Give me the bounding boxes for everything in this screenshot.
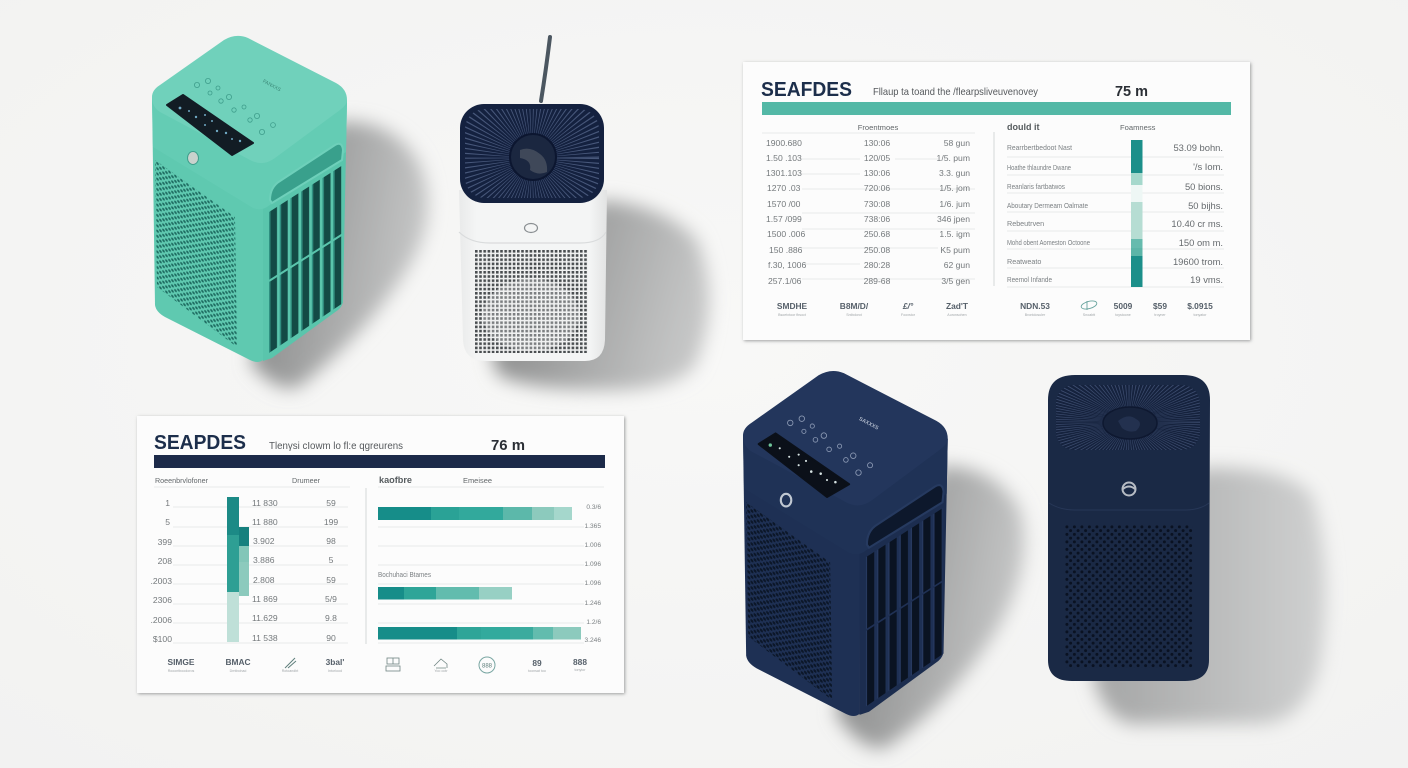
product: navy purifier angled — [743, 371, 948, 716]
lid seam — [459, 232, 606, 243]
fan hub — [1103, 407, 1157, 439]
left chart table: Drumeer — [292, 476, 320, 485]
front grille — [155, 160, 237, 347]
card background — [137, 416, 624, 693]
value column 1: 11 869 — [252, 594, 278, 604]
fan radial blades — [1067, 384, 1191, 460]
logo badge — [781, 494, 791, 506]
bar 1 — [378, 507, 572, 520]
footer stats: Sntbdorot — [846, 313, 862, 317]
footer stats: Yoo ootr — [434, 669, 448, 673]
axis values — [584, 504, 601, 644]
column 2 values: 280:28 — [864, 260, 890, 270]
footer stats: Rotoandbt — [282, 669, 298, 673]
title: SEAPDES — [154, 431, 246, 454]
axis values: 1.096 — [584, 580, 601, 587]
display indicators — [179, 107, 241, 142]
footer stats: tonyator — [1194, 313, 1207, 317]
row values: 50 bions. — [1185, 181, 1223, 192]
fan hub — [510, 134, 556, 180]
column 3 values: 1/5. pum — [937, 153, 970, 163]
footer stats: SMDHE — [777, 301, 808, 311]
side vent slats — [866, 508, 944, 706]
subtitle: Fllaup ta toand the /flearpsliveuvenovey — [873, 86, 1039, 98]
header bar — [762, 102, 1231, 115]
icon: pen stroke — [285, 658, 296, 668]
row labels: Rebeutrven — [1007, 219, 1044, 228]
side vent slats — [269, 165, 343, 353]
icon: circled badge — [479, 657, 495, 673]
card shadow — [744, 63, 1251, 341]
row values: 50 bijhs. — [1188, 200, 1223, 211]
vent cross rib — [866, 581, 944, 630]
stacked bar B — [239, 527, 249, 596]
title: SEAFDES — [761, 78, 852, 101]
product: white purifier — [459, 37, 607, 361]
row labels: Aboutary Dermeam Oalmate — [1007, 201, 1088, 210]
row labels: Rearrbertbedoot Nast — [1007, 143, 1072, 152]
axis values: 3.246 — [584, 637, 601, 644]
row labels: Hoathe thlaundre Dwane — [1007, 163, 1071, 172]
table rules — [762, 133, 975, 279]
row labels: Reemol Infande — [1007, 275, 1052, 284]
column 1 values: 1270 .03 — [767, 183, 801, 193]
lid top face — [743, 371, 948, 505]
icon: grid block — [386, 658, 400, 671]
column 1 values: 1570 /00 — [767, 199, 801, 209]
shadow: navy front purifier — [1092, 468, 1326, 724]
value column 1: 3.886 — [253, 555, 275, 565]
value column 2 — [324, 498, 338, 643]
row labels: Reatweato — [1007, 257, 1041, 266]
control display — [167, 95, 253, 155]
top buttons — [788, 416, 873, 475]
row labels — [1007, 143, 1090, 284]
column 2 values: 720:06 — [864, 183, 890, 193]
axis values: 1.2/6 — [586, 619, 601, 626]
carry handle — [867, 485, 944, 548]
product: teal purifier angled — [152, 36, 347, 362]
column 2 values: 289-68 — [864, 276, 891, 286]
axis values: 1.096 — [584, 561, 601, 568]
row values: 150 om m. — [1179, 237, 1223, 248]
column 2 values — [864, 138, 891, 286]
footer stats: Fooxstor — [901, 313, 916, 317]
control display — [759, 433, 849, 497]
footer stats: Snoabtt — [1083, 313, 1095, 317]
column 1 values — [766, 138, 806, 286]
vertical stacked bar — [1131, 140, 1142, 287]
value column 1: 3.902 — [253, 536, 275, 546]
fan hub blade — [1118, 416, 1140, 432]
grille highlight — [483, 279, 579, 351]
column 3 values: 58 gun — [944, 138, 970, 148]
value column 2: 98 — [326, 536, 336, 546]
row labels: .2006 — [150, 615, 172, 625]
column 2 values: 130:06 — [864, 138, 890, 148]
perforated grille — [475, 250, 588, 353]
bar 2 — [378, 587, 512, 600]
row values: '/s Iom. — [1193, 161, 1223, 172]
row values: 19600 trom. — [1173, 256, 1223, 267]
product: navy purifier front — [1048, 375, 1210, 681]
value column 2: 59 — [326, 575, 336, 585]
column 3 values: 1/5. jom — [939, 183, 970, 193]
value column 2: 90 — [326, 633, 336, 643]
fan hub blade — [520, 149, 547, 174]
row labels: $100 — [153, 634, 172, 644]
left table — [762, 123, 975, 286]
right bar chart — [378, 475, 604, 644]
card background — [743, 62, 1250, 340]
table rules — [173, 507, 348, 643]
value column 2: 9.8 — [325, 613, 337, 623]
fan top plate — [460, 104, 604, 203]
panel divider — [993, 132, 995, 286]
value column 1: 2.808 — [253, 575, 275, 585]
icon: circled badge: 888 — [482, 664, 493, 670]
column headers: Roeenbrvlofoner — [155, 476, 208, 485]
body right face — [860, 439, 948, 715]
footer stats: £/° — [902, 301, 914, 311]
column 1 values: 1.57 /099 — [766, 214, 802, 224]
value column 1: 11 538 — [252, 633, 278, 643]
footer stats — [777, 299, 1213, 317]
axis values: 0.3/6 — [586, 504, 601, 511]
column 1 values: 1301.103 — [766, 168, 802, 178]
column headers: dould it — [1007, 122, 1040, 132]
body right face — [263, 100, 347, 361]
value column 1 — [252, 498, 278, 643]
footer stats: tonytor — [574, 668, 586, 672]
footer stats: B8M/D/ — [840, 301, 869, 311]
column 3 values: 1/6. jum — [939, 199, 970, 209]
column 1 values: 257.1/06 — [768, 276, 802, 286]
footer stats: Rooontboodoros — [168, 669, 194, 673]
brand mark on lid: FANXXS — [261, 79, 282, 93]
chart rules — [378, 527, 584, 643]
vent cross rib — [269, 234, 343, 281]
column header: Froentmoes — [858, 123, 898, 132]
row labels: Reanlaris fartbatwos — [1007, 182, 1065, 191]
white body — [459, 190, 607, 361]
row values: 53.09 bohn. — [1173, 142, 1223, 153]
panel: teal specification sheet — [743, 62, 1251, 341]
value column 1: 11 880 — [252, 517, 278, 527]
footer stats: 89 — [532, 658, 542, 668]
row labels: .2003 — [150, 576, 172, 586]
footer stats: Drntbohad — [230, 669, 246, 673]
column 2 values: 120/05 — [864, 153, 890, 163]
value column 2: 59 — [326, 498, 336, 508]
column headers: kaofbre — [379, 475, 412, 485]
row labels: 399 — [158, 537, 172, 547]
panel divider — [365, 488, 367, 644]
footer stats: $.0915 — [1187, 301, 1213, 311]
column 1 values: f.30, 1006 — [768, 260, 806, 270]
lid band — [743, 436, 948, 554]
fan top plate — [1056, 385, 1200, 450]
headline value: 75 m — [1115, 83, 1148, 100]
axis values: 1.246 — [584, 600, 601, 607]
right table — [1007, 122, 1224, 287]
column 1 values: 1.50 .103 — [766, 153, 802, 163]
headline value: 76 m — [491, 437, 525, 454]
column 1 values: 1500 .006 — [767, 229, 805, 239]
column 3 values: 3.3. gun — [939, 168, 970, 178]
value column 2: 5/9 — [325, 594, 337, 604]
column 3 values: 1.5. igm — [939, 229, 970, 239]
row labels: 2306 — [153, 595, 172, 605]
column 3 values — [937, 138, 970, 286]
header bar — [154, 455, 605, 468]
row labels: 5 — [165, 517, 170, 527]
row values: 19 vms. — [1190, 274, 1223, 285]
shadow: white purifier — [490, 200, 709, 390]
column 2 values: 250.08 — [864, 245, 890, 255]
body left face — [152, 97, 264, 362]
power cable — [541, 37, 550, 101]
value column 1: 11.629 — [252, 613, 278, 623]
chart sublabel: Bochuhaci Btames — [378, 570, 431, 579]
footer stats — [168, 657, 587, 673]
column 2 values: 130:06 — [864, 168, 890, 178]
column 1 values: 1900.680 — [766, 138, 802, 148]
icon: capsule — [1080, 299, 1098, 311]
row values — [1171, 142, 1223, 285]
footer stats: Bsoetxtoor fbsoct — [778, 313, 806, 317]
front grille — [746, 502, 832, 700]
display indicators — [769, 443, 837, 483]
row labels: Mohd obent Aomeston Octoone — [1007, 238, 1090, 247]
row labels: 208 — [158, 556, 172, 566]
footer stats: Zad'T — [946, 301, 969, 311]
column 2 values: 738:06 — [864, 214, 890, 224]
shadow: teal purifier — [250, 122, 428, 388]
brand mark on lid: SAXXXS — [858, 416, 880, 432]
footer stats: 5009 — [1114, 301, 1133, 311]
logo badge — [188, 152, 198, 164]
panel: navy specification sheet — [137, 416, 625, 694]
perforated grille — [1065, 525, 1193, 668]
column 3 values: 3/5 gen — [941, 276, 970, 286]
footer stats: Auronsohen — [947, 313, 967, 317]
row labels — [150, 498, 172, 644]
footer stats: 3bal' — [326, 657, 344, 667]
logo mark — [1122, 482, 1136, 496]
fan radial blades — [477, 103, 587, 213]
subtitle: Tlenγsi cIowm lo fl:e qgreurens — [269, 440, 403, 452]
footer stats: 888 — [573, 657, 587, 667]
row values: 10.40 cr ms. — [1171, 218, 1223, 229]
column 3 values: K5 pum — [940, 245, 970, 255]
value column 2: 5 — [329, 555, 334, 565]
lid seam — [1049, 503, 1209, 510]
column 2 values: 730:08 — [864, 199, 890, 209]
column 3 values: 346 jpen — [937, 214, 970, 224]
column 1 values: 150 .886 — [769, 245, 803, 255]
table rules — [1007, 157, 1224, 287]
icon: house line — [434, 659, 447, 668]
left chart table — [150, 476, 350, 644]
lid top face — [152, 36, 347, 163]
lid band — [152, 97, 347, 209]
axis values: 1.365 — [584, 523, 601, 530]
body left face — [743, 436, 861, 716]
logo mark — [524, 224, 538, 232]
bar 3 — [378, 627, 581, 640]
footer stats: SIMGE — [168, 657, 195, 667]
navy body — [1048, 375, 1210, 681]
footer stats: BMAC — [225, 657, 251, 667]
top buttons — [194, 78, 275, 135]
column 3 values: 62 gun — [944, 260, 970, 270]
value column 2: 199 — [324, 517, 338, 527]
footer stats: NDN.53 — [1020, 301, 1050, 311]
shadow: navy angled purifier — [835, 466, 1024, 748]
footer stats: troyner — [1154, 313, 1166, 317]
axis values: 1.006 — [584, 542, 601, 549]
row labels: 1 — [165, 498, 170, 508]
footer stats: Intorlood — [328, 669, 342, 673]
footer stats: $59 — [1153, 301, 1167, 311]
right table: Foamness — [1120, 123, 1156, 132]
footer stats: Brontdosuler — [1025, 313, 1046, 317]
carry handle — [270, 144, 343, 203]
column 2 values: 250.68 — [864, 229, 890, 239]
footer stats: toonsat too — [528, 669, 546, 673]
stacked bar A — [227, 497, 239, 642]
value column 1: 11 830 — [252, 498, 278, 508]
footer stats: toystoone — [1115, 313, 1131, 317]
card shadow — [138, 417, 625, 694]
right bar chart: Emeisee — [463, 476, 492, 485]
